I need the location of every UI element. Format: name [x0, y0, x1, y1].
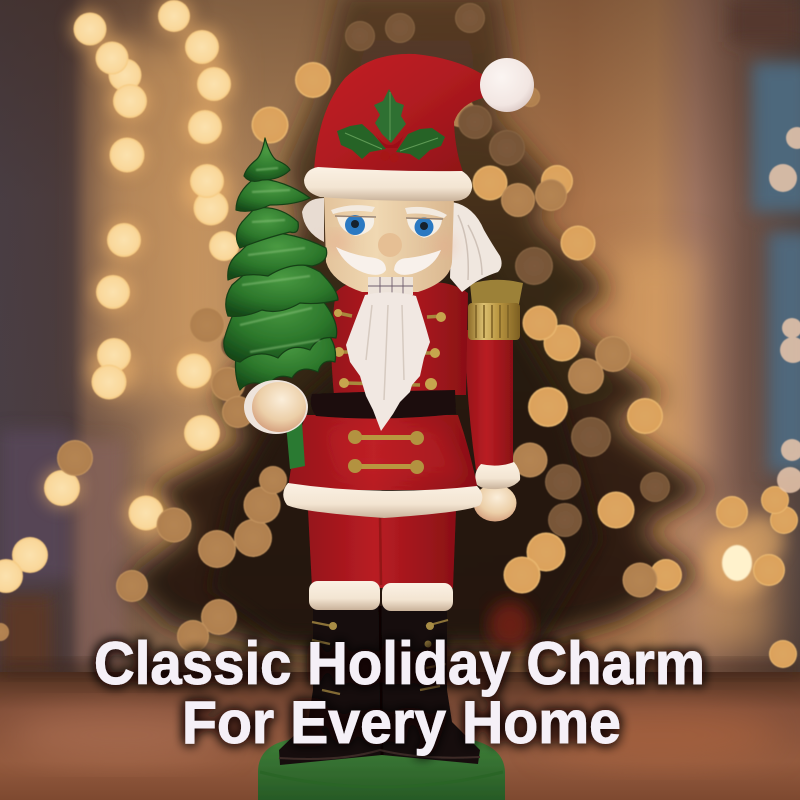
- display base: [258, 738, 505, 800]
- headline: For Every Home: [182, 689, 621, 756]
- chest gold frogging: [334, 309, 446, 390]
- bokeh lights: dim inside tree: [221, 3, 670, 537]
- nose: [378, 233, 402, 257]
- right arm sleeve: [465, 330, 513, 470]
- holly decoration: [337, 89, 445, 162]
- bokeh lights: bright: [0, 0, 239, 593]
- bokeh lights: amber: [252, 62, 798, 668]
- hair right: [450, 202, 502, 292]
- skirt sheen: [326, 427, 462, 478]
- floor: [0, 660, 800, 800]
- blurred christmas tree: [125, 0, 710, 655]
- foliage highlights: [240, 168, 320, 352]
- tree foliage layers: [224, 138, 338, 390]
- mustache: [336, 247, 441, 275]
- right cuff: [475, 462, 520, 489]
- santa hat: [314, 54, 483, 172]
- bokeh lights: muted: [0, 87, 658, 652]
- epaulette: [468, 280, 523, 340]
- hair left: [302, 198, 324, 242]
- warm wall glow: [95, 40, 770, 650]
- jacket torso: [331, 283, 468, 395]
- nutcracker figure: [224, 54, 534, 800]
- small tree held in hand: [224, 138, 338, 469]
- eye right: [406, 218, 443, 238]
- left hand with cuff: [244, 380, 308, 434]
- bright lamp glow: [722, 545, 752, 581]
- gold belly braces: [348, 430, 424, 474]
- hair strands: [458, 215, 482, 280]
- headline: Classic Holiday Charm: [94, 630, 705, 697]
- hat brim: [304, 167, 472, 201]
- cheek blush: [328, 232, 453, 255]
- right hand: [474, 484, 516, 522]
- beard: [346, 292, 430, 431]
- face: [324, 196, 454, 292]
- headline: [94, 630, 705, 756]
- boots: [279, 606, 480, 765]
- boot fur cuffs: [309, 581, 453, 611]
- eye left: [335, 215, 376, 236]
- trousers: [308, 510, 456, 588]
- belt: [311, 390, 456, 419]
- tree trunk: [286, 422, 305, 469]
- bokeh halo glow: [42, 0, 784, 597]
- ornament glow: [488, 601, 532, 649]
- teeth: [368, 277, 413, 295]
- eyebrows: [331, 205, 447, 218]
- coat fur hem: [283, 483, 482, 518]
- jacket skirt: [288, 415, 478, 490]
- bokeh lights: pale over window: [769, 127, 800, 493]
- beard strands: [366, 305, 404, 400]
- hat pompom: [480, 58, 534, 112]
